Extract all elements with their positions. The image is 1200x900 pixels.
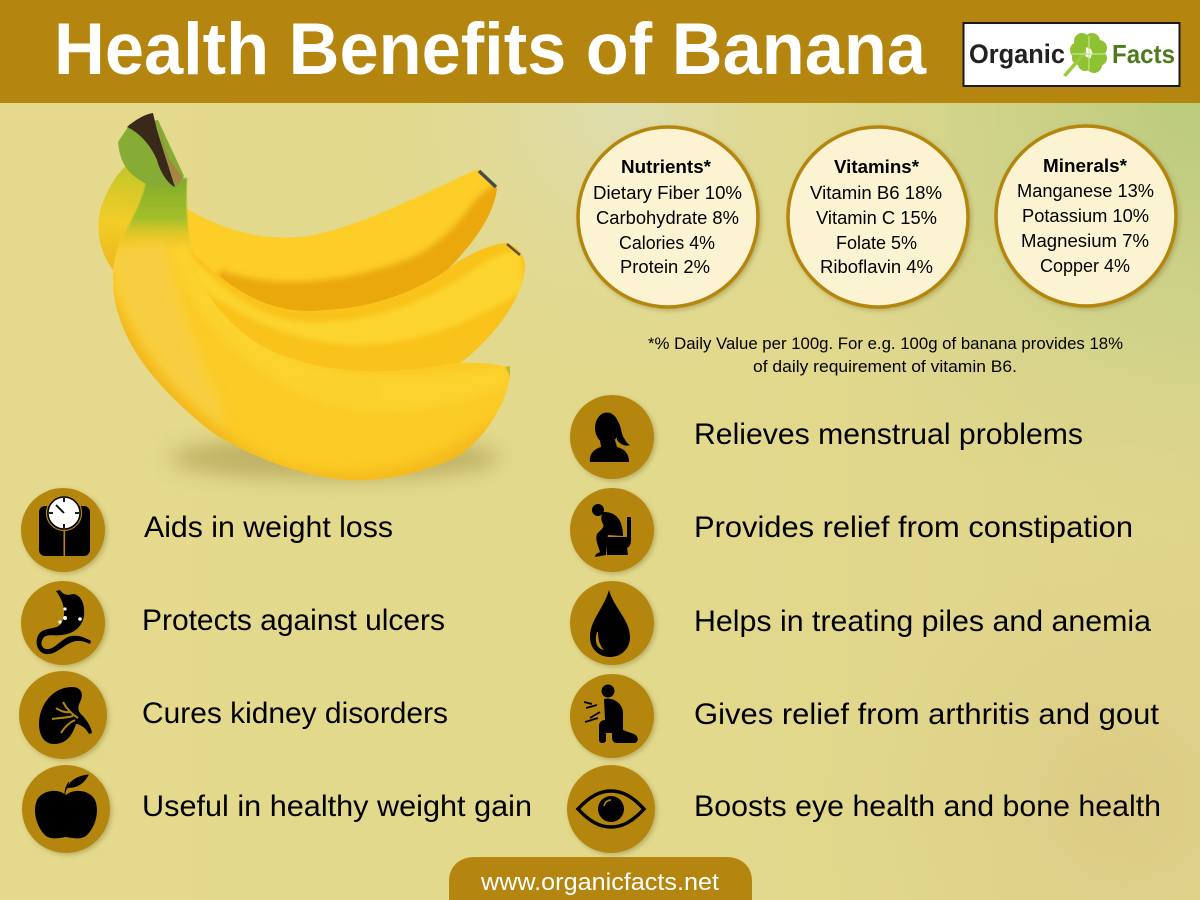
icon: apple	[22, 765, 110, 853]
header band	[0, 0, 1200, 103]
text: piles: Helps in treating piles and anemia	[694, 605, 1151, 638]
text: constipation: Provides relief from constipation	[694, 511, 1133, 544]
title: Health Benefits of Banana	[54, 9, 927, 90]
logo: Organic Facts: Facts	[1112, 39, 1175, 69]
icon: woman	[570, 395, 654, 479]
panel: nutrients: Dietary Fiber 10%	[593, 183, 742, 203]
panel: nutrients: Nutrients*	[621, 157, 711, 177]
footnote: *% Daily Value per 100g. For e.g. 100g of banana provides 18%	[648, 335, 1123, 353]
icon: eye	[567, 765, 655, 853]
icon: stomach	[21, 581, 105, 665]
panel: nutrients: Protein 2%	[620, 257, 710, 277]
text: weight loss: Aids in weight loss	[144, 511, 393, 544]
footnote	[648, 335, 1123, 376]
icon: weighing scale	[21, 488, 105, 572]
text: ulcers: Protects against ulcers	[142, 604, 445, 637]
banana bunch illustration	[98, 113, 535, 490]
panel: vitamins: Riboflavin 4%	[820, 257, 933, 277]
panel: nutrients: Carbohydrate 8%	[596, 208, 739, 228]
text: menstrual: Relieves menstrual problems	[694, 418, 1083, 451]
panel: vitamins	[788, 127, 968, 307]
text: kidney: Cures kidney disorders	[142, 697, 448, 730]
icon: kidney	[19, 671, 107, 759]
panel: vitamins: Vitamin B6 18%	[810, 183, 942, 203]
panel: minerals: Minerals*	[1043, 156, 1127, 176]
panel: minerals: Magnesium 7%	[1021, 231, 1149, 251]
panel: minerals: Copper 4%	[1040, 256, 1130, 276]
panel: minerals	[996, 126, 1176, 306]
panel: vitamins: Vitamins*	[834, 157, 919, 177]
logo: Organic Facts: Organic	[969, 39, 1065, 69]
panel: minerals: Potassium 10%	[1022, 206, 1149, 226]
icon: blood drop	[570, 581, 654, 665]
footer url tab	[449, 857, 752, 900]
panel: vitamins: Folate 5%	[836, 233, 917, 253]
icon: kneeling man	[570, 674, 654, 758]
icon: clover	[1063, 33, 1107, 77]
text: eye health: Boosts eye health and bone health	[694, 790, 1161, 823]
panel: nutrients: Calories 4%	[619, 233, 715, 253]
text: arthritis: Gives relief from arthritis and gout	[694, 698, 1160, 731]
icon: toilet	[570, 488, 654, 572]
panel: vitamins: Vitamin C 15%	[816, 208, 937, 228]
text: weight gain: Useful in healthy weight gain	[142, 790, 532, 823]
panel: minerals: Manganese 13%	[1017, 181, 1154, 201]
footer url tab: www.organicfacts.net	[480, 869, 719, 896]
logo: Organic Facts	[964, 23, 1180, 86]
panel: nutrients	[578, 127, 758, 307]
footnote: of daily requirement of vitamin B6.	[753, 358, 1017, 376]
